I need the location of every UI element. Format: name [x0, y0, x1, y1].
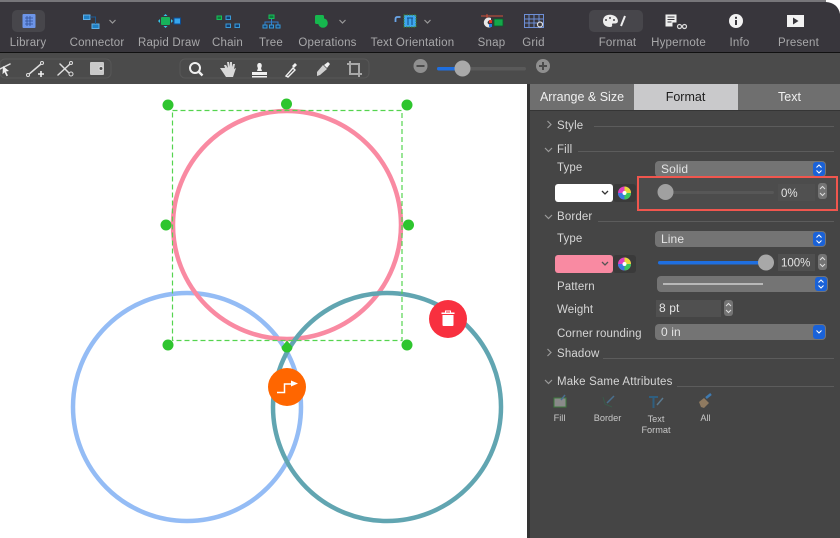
border section: Corner rounding — [557, 328, 642, 340]
edit point tools — [0, 62, 104, 77]
tree tool: Tree — [259, 37, 283, 49]
selection handles — [160, 98, 414, 352]
tree tool — [259, 15, 283, 49]
highlighted opacity control: 0% — [781, 188, 798, 200]
info tool: Info — [730, 37, 749, 49]
format panel — [527, 84, 840, 538]
tabs: Arrange & Size — [540, 90, 624, 104]
chain tool: Chain — [212, 37, 243, 49]
text format attribute: Text — [648, 414, 665, 424]
border section: 8 pt — [659, 301, 680, 315]
hypernote tool — [651, 14, 706, 49]
text format attribute: Format — [641, 425, 671, 435]
fill attribute — [554, 395, 566, 423]
border section: Type — [557, 233, 582, 245]
pink circle — [173, 111, 401, 339]
tabs: Text — [778, 90, 801, 104]
shadow section — [548, 348, 834, 360]
top toolbar — [0, 0, 840, 53]
blue circle — [73, 293, 301, 521]
style section: Style — [557, 120, 583, 132]
secondary toolbar — [0, 53, 840, 84]
border section: Weight — [557, 304, 594, 316]
library tool: Library — [10, 37, 46, 49]
search, hand, stamp, eyedropper, brush, crop tools — [190, 61, 362, 78]
connector tool: Connector — [70, 37, 124, 49]
hypernote tool: Hypernote — [651, 37, 706, 49]
border attribute — [594, 396, 621, 423]
zoom slider — [414, 59, 550, 76]
border section: Line — [661, 232, 684, 246]
operations tool — [298, 15, 357, 49]
color wheel — [618, 186, 631, 200]
library tool — [10, 10, 46, 49]
border section: Border — [557, 211, 592, 223]
fill section: Fill — [557, 144, 572, 156]
text orientation tool — [371, 15, 454, 49]
border section: Pattern — [557, 281, 595, 293]
connector tool — [70, 15, 124, 49]
shadow section: Shadow — [557, 348, 600, 360]
grid tool: Grid — [522, 37, 545, 49]
operations tool: Operations — [298, 37, 357, 49]
style section — [548, 120, 834, 132]
teal circle — [273, 293, 501, 521]
border section — [545, 211, 834, 340]
border section: 100% — [781, 258, 810, 270]
text format attribute — [641, 397, 671, 435]
snap tool: Snap — [478, 37, 505, 49]
make same attributes section: Make Same Attributes — [557, 376, 673, 388]
border section: 0 in — [661, 325, 681, 339]
canvas — [0, 84, 527, 538]
connector button — [268, 368, 306, 406]
grid tool — [522, 14, 545, 49]
present tool — [778, 15, 820, 49]
info tool — [729, 14, 749, 49]
delete button — [429, 300, 467, 338]
present tool: Present — [778, 37, 820, 49]
format tool — [589, 10, 643, 49]
rapid draw tool — [138, 14, 201, 49]
snap tool — [478, 14, 505, 49]
fill section — [545, 144, 834, 202]
make same attributes section — [545, 376, 834, 435]
tabs — [530, 84, 840, 111]
rapid draw tool: Rapid Draw — [138, 37, 201, 49]
all attribute: All — [700, 413, 711, 423]
text orientation tool: Text Orientation — [371, 37, 454, 49]
selection box — [172, 110, 402, 340]
fill section: Solid — [661, 162, 688, 176]
format tool: Format — [599, 37, 637, 49]
tabs: Format — [666, 90, 706, 104]
color wheel — [618, 258, 631, 270]
highlighted opacity control — [638, 177, 838, 211]
fill section: Type — [557, 162, 582, 174]
fill attribute: Fill — [554, 413, 565, 423]
border attribute: Border — [594, 413, 621, 423]
chain tool — [212, 16, 243, 49]
all attribute — [699, 394, 711, 423]
